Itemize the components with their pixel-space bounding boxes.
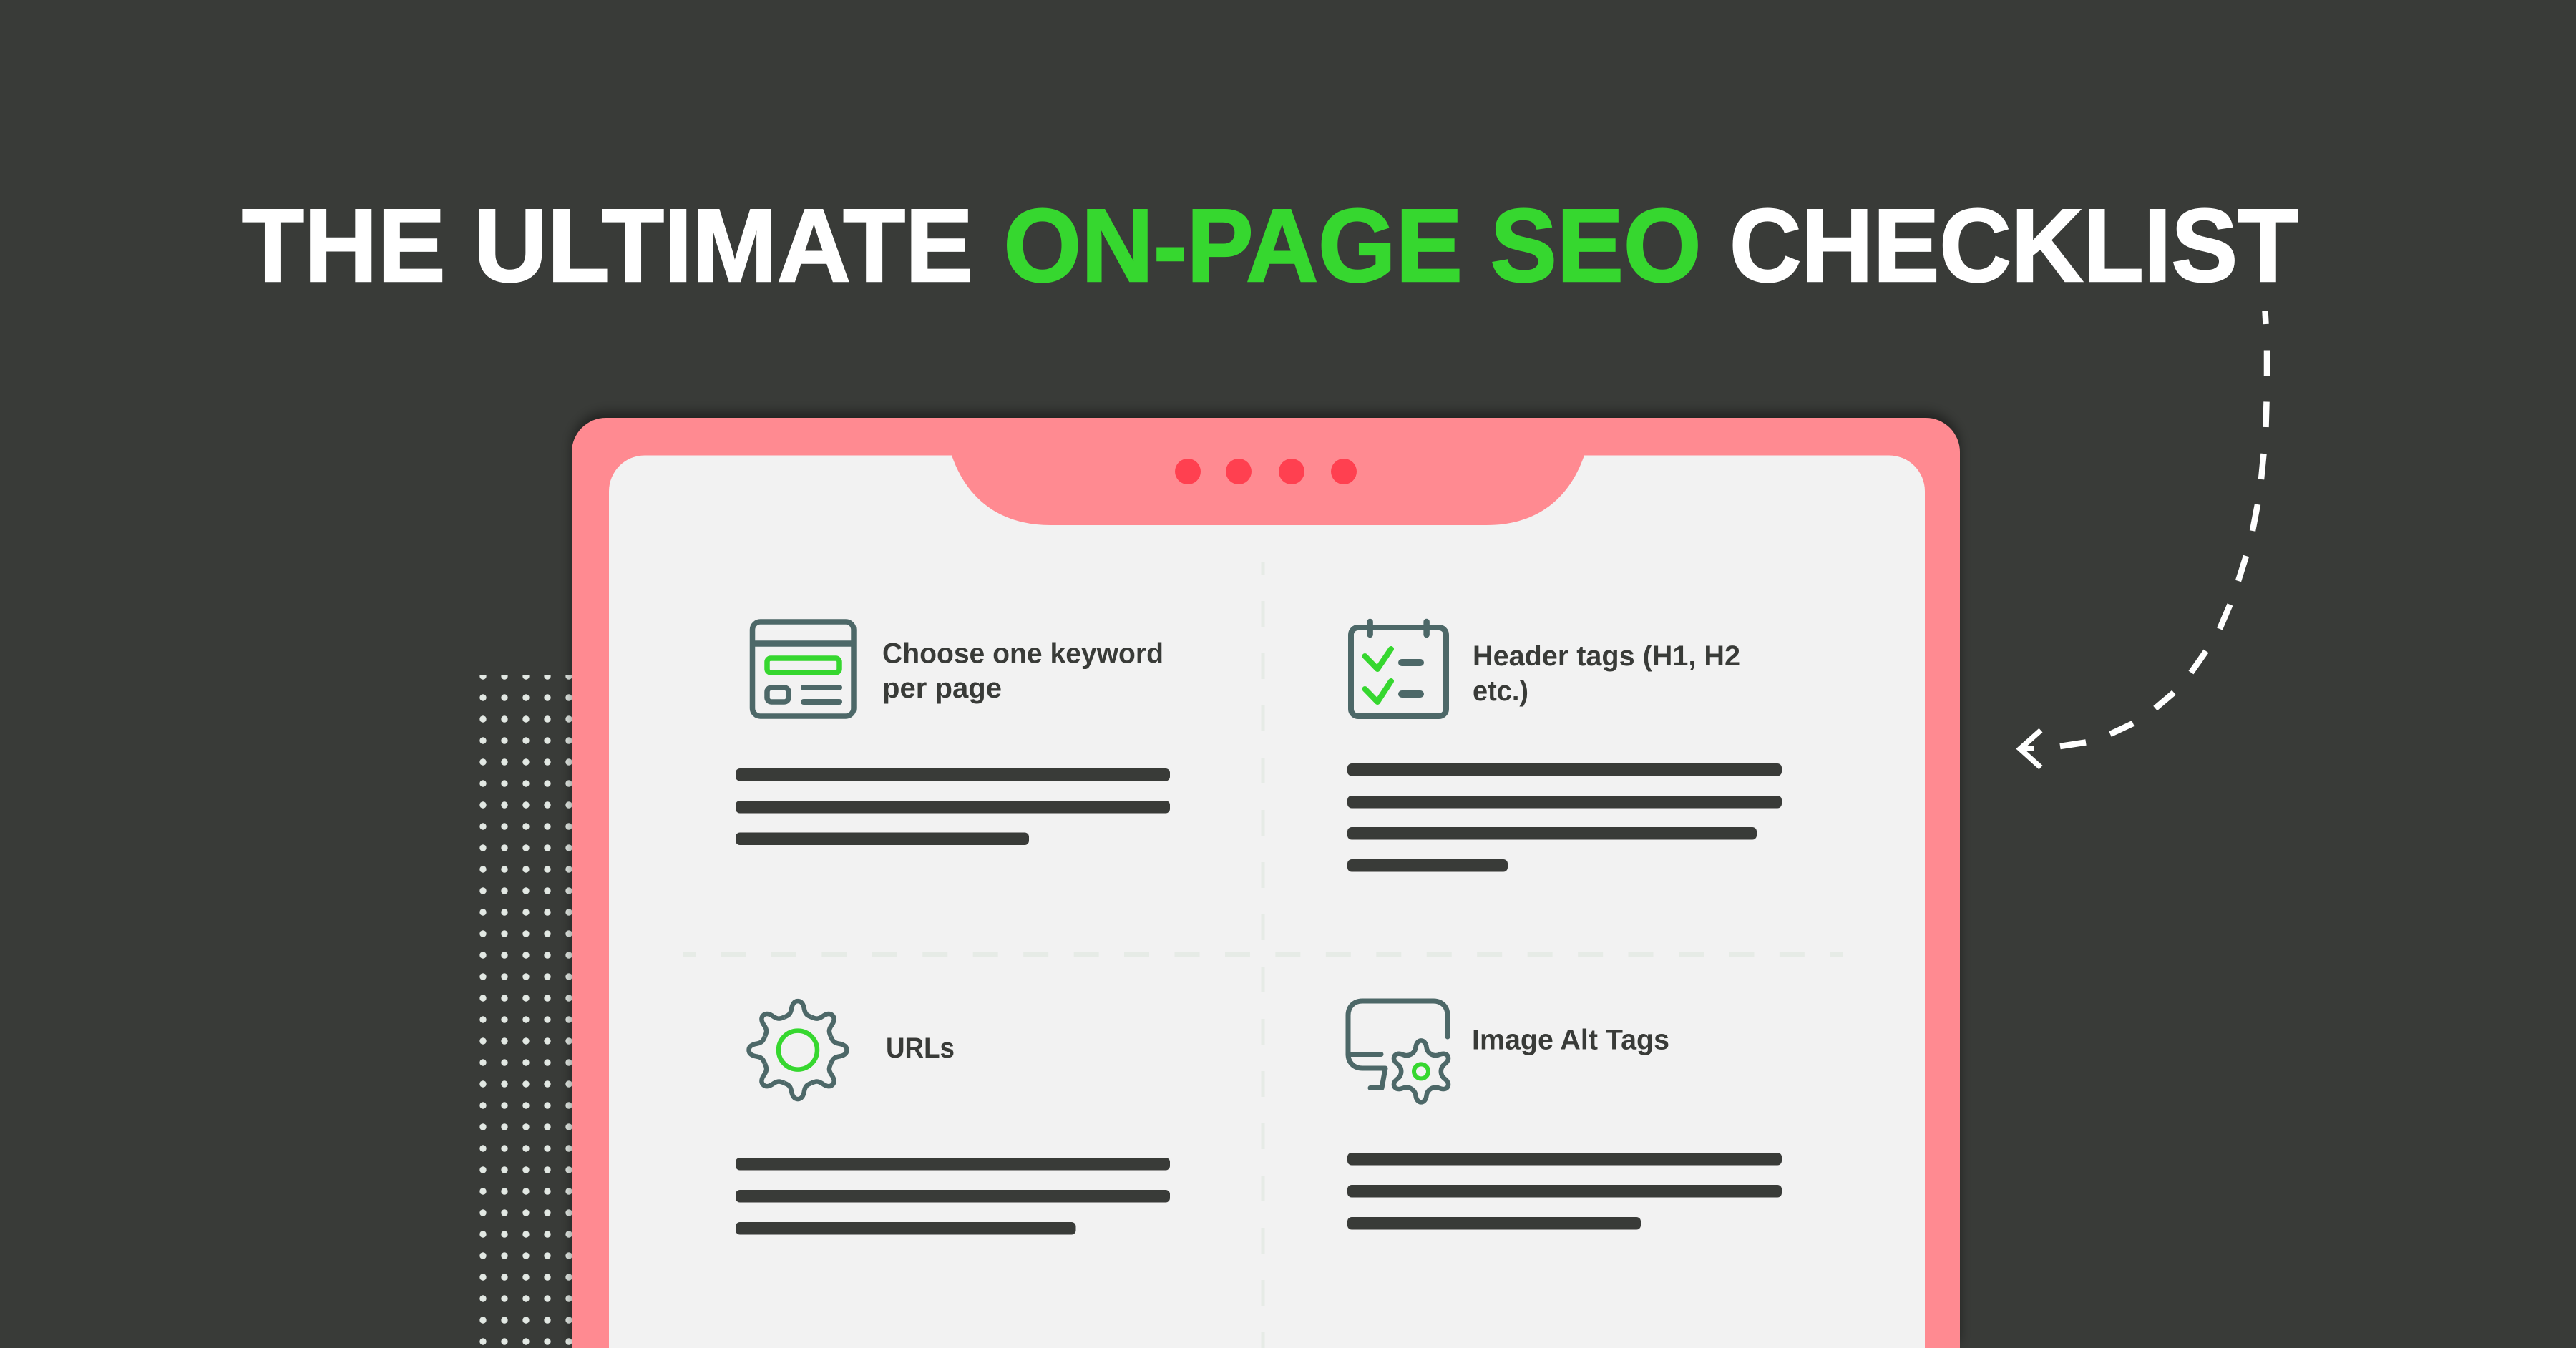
title bbox=[242, 187, 2298, 303]
text placeholder lines bbox=[1347, 763, 1782, 871]
text placeholder lines bbox=[736, 768, 1170, 845]
title: CHECKLIST bbox=[1729, 187, 2298, 303]
icon: calendar checklist bbox=[1351, 622, 1446, 716]
dot pattern bbox=[472, 675, 576, 1348]
panel content area bbox=[609, 455, 1925, 1348]
title: THE ULTIMATE bbox=[242, 187, 973, 303]
label: urls: URLs bbox=[886, 1032, 955, 1064]
icon: monitor with gear bbox=[1348, 1001, 1453, 1102]
panel: browser window bbox=[572, 418, 1960, 1348]
icon: browser window layout bbox=[753, 622, 854, 716]
window dots bbox=[1175, 459, 1357, 484]
icon: gear bbox=[748, 1001, 847, 1099]
text placeholder lines bbox=[736, 1158, 1170, 1235]
panel frame bbox=[572, 418, 1960, 1348]
section: header tags bbox=[1347, 622, 1782, 871]
arrow: dashed curve pointing to panel bbox=[2020, 311, 2267, 768]
section: image alt tags bbox=[1347, 1001, 1782, 1229]
label: image alt tags: Image Alt Tags bbox=[1472, 1025, 1669, 1056]
section: choose one keyword bbox=[736, 622, 1170, 845]
text placeholder lines bbox=[1347, 1153, 1782, 1229]
browser notch bbox=[952, 451, 1584, 525]
section: urls bbox=[736, 1001, 1170, 1235]
label: choose one keyword: per page bbox=[882, 673, 1002, 704]
label: choose one keyword: Choose one keyword bbox=[882, 638, 1163, 670]
label: header tags: etc.) bbox=[1473, 675, 1528, 707]
label: header tags: Header tags (H1, H2 bbox=[1473, 640, 1740, 672]
title: ON-PAGE SEO bbox=[1003, 187, 1702, 303]
